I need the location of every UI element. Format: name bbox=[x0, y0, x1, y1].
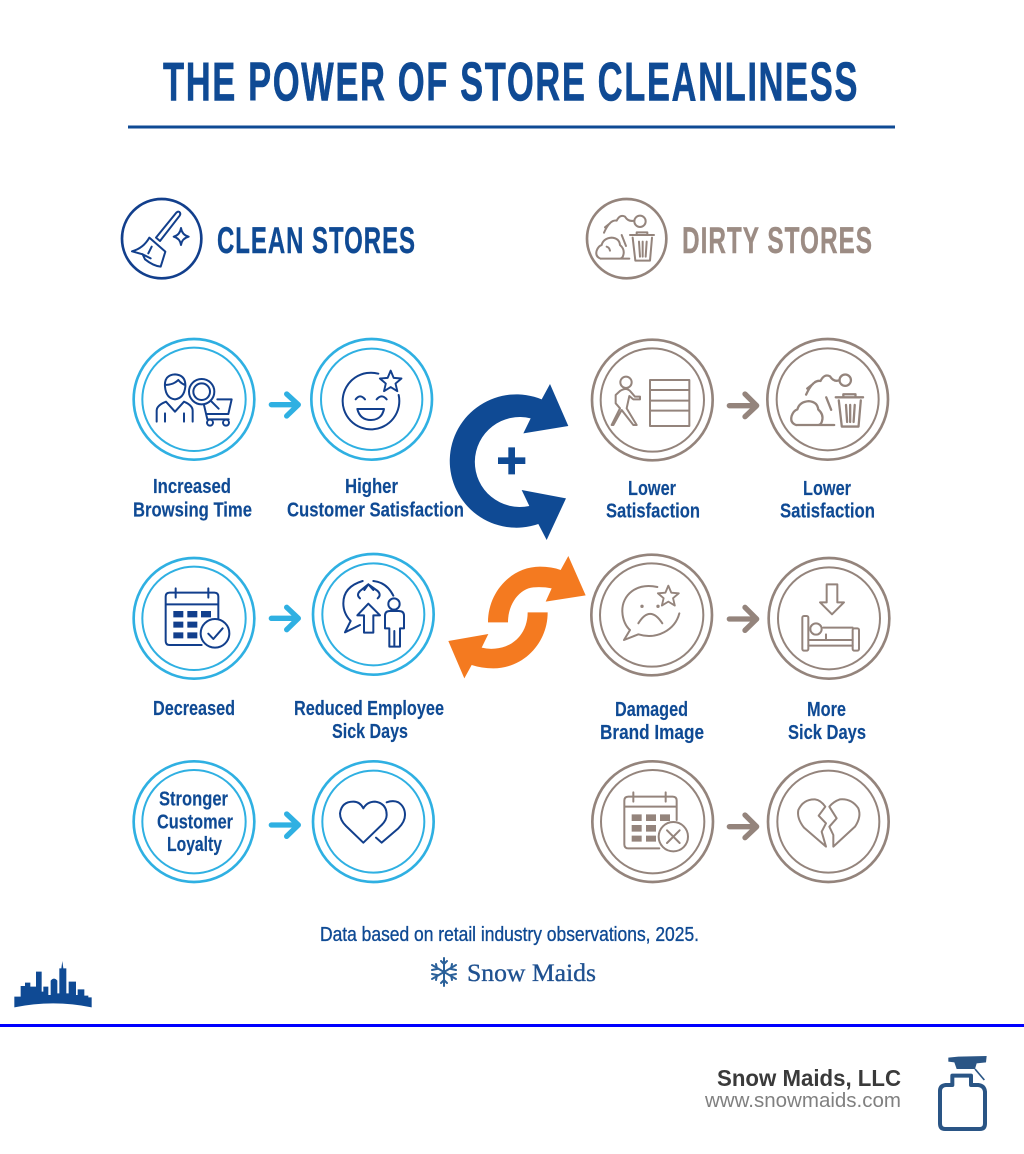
label bbox=[600, 698, 704, 744]
arrow bbox=[271, 394, 298, 416]
label: Sick Days bbox=[788, 721, 866, 744]
arrow bbox=[729, 394, 757, 417]
label: Customer bbox=[157, 810, 233, 834]
icon: bed with down arrow bbox=[769, 558, 889, 679]
icon: broom bbox=[122, 199, 201, 278]
heading text: DIRTY STORES bbox=[682, 220, 873, 261]
label: Decreased bbox=[153, 697, 235, 720]
icon: city skyline bbox=[14, 961, 92, 1007]
title underline bbox=[128, 126, 895, 128]
arrow bbox=[729, 815, 757, 838]
panel: dirty stores bbox=[587, 199, 889, 882]
label: Damaged bbox=[615, 698, 688, 721]
arrow bbox=[729, 607, 757, 630]
label: Lower bbox=[803, 477, 851, 500]
item: more sick days bbox=[769, 558, 889, 744]
icon: smiling face with star bbox=[311, 339, 432, 460]
panel: clean stores bbox=[122, 199, 464, 882]
item: increased browsing time bbox=[133, 339, 254, 522]
footer company text bbox=[704, 1065, 901, 1112]
icon: spray bottle bbox=[940, 1056, 987, 1129]
label: Satisfaction bbox=[606, 500, 700, 522]
label bbox=[606, 477, 700, 522]
logo text: Snow Maids bbox=[467, 960, 596, 987]
label: Customer Satisfaction bbox=[287, 498, 464, 522]
item: stronger customer loyalty bbox=[134, 761, 254, 882]
label: Satisfaction bbox=[780, 500, 875, 522]
label: Sick Days bbox=[332, 720, 408, 743]
icon: shopper with magnifier and cart bbox=[134, 339, 254, 460]
icon: blue cycle arrows with plus bbox=[450, 384, 568, 540]
item: higher customer satisfaction bbox=[287, 339, 464, 522]
logo: Snow Maids bbox=[432, 958, 596, 987]
item: decreased bbox=[134, 558, 254, 720]
icon: two hearts bbox=[313, 761, 434, 882]
icon: snowflake bbox=[432, 958, 456, 986]
footer divider bbox=[0, 1024, 1024, 1027]
heading: clean stores bbox=[122, 199, 416, 278]
footer company text: www.snowmaids.com bbox=[704, 1089, 901, 1112]
footer company text: Snow Maids, LLC bbox=[717, 1065, 901, 1091]
label bbox=[287, 475, 464, 522]
label bbox=[780, 477, 875, 522]
item: lower satisfaction, walking past shelves bbox=[592, 340, 713, 522]
label: Loyalty bbox=[167, 833, 222, 856]
icon: broken heart bbox=[768, 761, 889, 882]
icon: calendar with check bbox=[134, 558, 254, 679]
label bbox=[157, 788, 233, 856]
label: Reduced Employee bbox=[294, 697, 444, 720]
label: Lower bbox=[628, 477, 676, 500]
icon: sad speech bubble with star bbox=[591, 555, 712, 675]
label: Brand Image bbox=[600, 721, 704, 744]
label bbox=[133, 475, 252, 522]
label: Increased bbox=[153, 475, 231, 498]
icon: trash pile bbox=[767, 339, 888, 460]
label bbox=[294, 697, 444, 743]
label: More bbox=[807, 698, 846, 721]
label: Higher bbox=[345, 475, 398, 498]
heading text: CLEAN STORES bbox=[217, 220, 416, 261]
icon: calendar with cross bbox=[592, 761, 713, 882]
item: damaged brand image bbox=[591, 555, 712, 744]
arrow bbox=[271, 814, 298, 836]
label: Browsing Time bbox=[133, 498, 252, 522]
icon: person walking past shelves bbox=[592, 340, 713, 460]
item: lower satisfaction, trash bbox=[767, 339, 888, 522]
heading: dirty stores bbox=[587, 199, 873, 278]
icon: trash and debris bbox=[587, 199, 666, 278]
source note: Data based on retail industry observations, 2025. bbox=[320, 924, 699, 946]
badge ring bbox=[134, 761, 254, 882]
label: Stronger bbox=[159, 788, 228, 810]
arrow bbox=[271, 607, 298, 630]
icon: speech bubble, up arrow and person bbox=[313, 554, 434, 675]
icon: orange swap arrows bbox=[448, 556, 586, 678]
item: reduced employee sick days bbox=[294, 554, 444, 743]
label bbox=[788, 698, 866, 744]
